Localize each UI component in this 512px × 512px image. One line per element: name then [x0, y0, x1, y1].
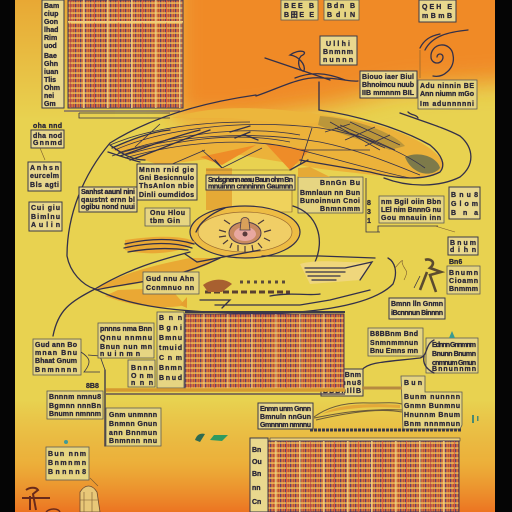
label: e: Bnmnnn nnu — [109, 438, 157, 445]
label: left three: Bimlnu — [31, 214, 60, 221]
label: b: pnnns nma Bnn — [100, 326, 152, 333]
panel: orange header boxes in centre — [206, 168, 292, 212]
label: left three: Aulin — [31, 222, 60, 229]
panel: middle data table: Bnud — [159, 375, 182, 382]
panel: bottom data table: Bn — [252, 447, 261, 454]
label: mid top right: Ann niumn mGo — [420, 91, 474, 98]
label: far right column: Bunm nunnnn — [404, 394, 460, 401]
label: lens text — [143, 272, 199, 294]
label: under top: nunnn — [323, 57, 353, 64]
panel: middle data table: Bnn — [159, 315, 182, 322]
fish scale detail — [318, 116, 405, 150]
label: left centre: qaustnt ernn bl — [81, 197, 135, 204]
label: f — [46, 447, 89, 480]
label: right centre — [298, 177, 363, 213]
label: lower centre wide: Enmn unm Gnnn — [260, 406, 311, 413]
label: right c — [368, 328, 423, 356]
label: lower centre wide — [258, 403, 313, 429]
label: left one: Gnnmd — [33, 140, 62, 147]
label: e: Gnm unmnnn — [109, 412, 157, 419]
panel: top data table: Bae — [44, 53, 57, 60]
label: right centre: Bunoinnun Cnoi — [300, 198, 360, 205]
label: narrow column: 1 — [367, 218, 371, 225]
panel: top label blocks — [281, 0, 477, 109]
label: lower centre: BBBnIllB — [323, 388, 361, 395]
label: central band: mnuinnn cnnninnn Gaumnn — [208, 184, 293, 190]
label: central band: Sndsgnenn aeau Baun ohm Bn — [208, 177, 293, 184]
panel: top data table: Ghn — [44, 61, 58, 68]
panel: top data table — [42, 0, 183, 118]
label: under top: Bnmnm — [323, 49, 353, 56]
label: f: Bnmnmn — [48, 460, 86, 467]
label: c: Bnnn — [131, 365, 153, 372]
label: far right column: Hnunnm Bnum — [404, 412, 460, 419]
label: right centre: Bmnlaun nn Bun — [300, 190, 360, 197]
label: lower right: Bnum — [450, 240, 476, 247]
label: far right column: Gnmn Bunmnu — [404, 403, 460, 410]
label: mid top right: Im adunnnnni — [420, 101, 474, 108]
icon: ship and figure — [22, 478, 100, 512]
black right margin — [495, 0, 512, 512]
label: small under: Onu Hlou — [150, 210, 185, 217]
label: right d: Bnunn Bnumn — [432, 351, 476, 358]
label: top centre right: Bdn B — [327, 3, 355, 10]
curve connector — [310, 403, 461, 430]
label: left centre: ogibu nond nuui — [81, 204, 135, 211]
label: mid top — [360, 71, 417, 98]
label: left two: Anhsn — [30, 165, 59, 172]
label: right of wing: Bna — [451, 210, 478, 217]
panel: top data table: Rim — [44, 35, 57, 42]
label: right of wing: Glom — [451, 201, 478, 208]
panel: bottom data table: nn — [252, 485, 261, 492]
teal marker — [449, 331, 455, 338]
icon: green leaves — [195, 434, 228, 442]
label: right d: Bnnunnmn — [432, 366, 476, 373]
panel: bottom data table — [250, 438, 460, 512]
label: c: nnn — [131, 380, 153, 387]
label: top centre left: BEE B — [284, 3, 314, 10]
label: left one: oha nnd — [33, 123, 62, 130]
label: left three: Cui giu — [31, 205, 60, 212]
label: d: 8B8 — [86, 383, 99, 390]
panel: centre labels — [79, 164, 480, 255]
label: e: ann Bnnmun — [109, 430, 157, 437]
label: f: Bnnnn8 — [48, 469, 86, 476]
label: a: Bhaat Gnum — [35, 358, 77, 365]
label: d: Bgmnn nnnBn — [49, 403, 101, 410]
label: big left centre: ThsAnlon nbie — [139, 183, 194, 190]
panel: top data table: Ohm — [44, 85, 60, 92]
label: left two: eurcelm — [30, 173, 59, 180]
orange triangles — [200, 143, 310, 170]
label: left one: dha nod — [33, 133, 62, 140]
label: right d: Ednnn Gnnmnm — [432, 342, 476, 349]
label: right c: Snmnmmnun — [370, 340, 418, 347]
panel: bottom data table: Bn — [252, 471, 261, 478]
label: far right column: Bun — [404, 380, 422, 387]
teal dot — [64, 440, 68, 444]
label: right b: iBcnnnun Binnnn — [391, 310, 443, 317]
wing upper band — [112, 114, 444, 178]
label: big left centre: Dinli oumdidos — [139, 192, 194, 199]
panel: middle data table: Bgni — [159, 325, 182, 332]
label: lower centre — [321, 369, 363, 396]
label: b — [98, 323, 154, 358]
diagram: central eye — [190, 206, 319, 262]
black left margin — [0, 0, 15, 512]
label: right a: Cioamn — [449, 278, 478, 285]
label: left centre — [79, 187, 137, 212]
label: a: Gud ann Bo — [35, 342, 77, 349]
label: right b: Bmnn lln Gnmn — [391, 301, 443, 308]
panel: top data table: Tlis — [44, 77, 56, 84]
label: under top — [320, 36, 357, 65]
panel: lower left labels — [33, 323, 161, 480]
label: top right — [419, 0, 456, 22]
panel: top data table: lhad — [44, 27, 58, 34]
outlines — [67, 95, 256, 289]
panel: bottom data table: Ou — [252, 459, 262, 466]
label: narrow column: 3 — [367, 209, 371, 216]
label: top centre right: BdIN — [327, 12, 355, 19]
label: right d — [426, 338, 478, 373]
label: left centre: Sanhst aaunl nini — [81, 189, 135, 196]
label: lens text: Gud nnu Ahn — [146, 276, 194, 283]
icon: landscape strip — [200, 280, 320, 308]
label: lower right: dihn — [450, 247, 476, 254]
label: d — [47, 383, 103, 419]
panel: middle data table: Cnm — [159, 355, 182, 362]
label: narrow column: 8 — [367, 200, 371, 207]
label: lower centre: Bnnmnu8 — [323, 380, 361, 387]
label: top centre right — [324, 0, 359, 20]
label: right centre: Bnmnnmm — [320, 206, 360, 213]
label: e: Bnmnn Gnun — [109, 421, 157, 428]
label: central band — [206, 175, 295, 190]
label: mid top right — [418, 80, 477, 109]
label: b: nuinmn — [100, 351, 140, 358]
label: right big — [379, 196, 444, 223]
label: f: Bun nnm — [48, 451, 86, 458]
label: mid top: Biouo iaer Biul — [362, 74, 414, 81]
label: lower centre: Ennlt Bnm — [323, 372, 361, 379]
label: narrow column — [367, 200, 371, 225]
label: right a: Bn6 — [449, 259, 462, 266]
label: big left centre: Mnnn rnid gie — [139, 167, 194, 174]
panel: top data table: Bam — [44, 3, 59, 10]
label: right a: Bnumn — [449, 270, 478, 277]
label: top centre left: B田E E — [284, 11, 314, 19]
panel: middle data table: tmuid — [159, 345, 182, 352]
label: right b — [389, 298, 445, 319]
label: right big: Gou mnauin inn — [381, 215, 441, 222]
icon: small figure — [414, 259, 441, 292]
label: under top: Ullhi — [326, 41, 350, 48]
label: right a — [447, 259, 480, 294]
label: a — [33, 339, 81, 375]
panel: middle data table: Bmnu — [159, 335, 182, 342]
icon: spiral — [420, 30, 468, 78]
panel: left labels — [28, 123, 64, 231]
label: right of wing — [449, 187, 480, 219]
panel: top data table: uod — [44, 43, 57, 50]
label: left one — [31, 123, 64, 148]
label: small under: tbm Gin — [150, 218, 180, 225]
icon: bird on branch — [256, 51, 358, 110]
label: b: Qnnu nnmnu — [100, 335, 152, 342]
label: lower centre wide: Bmnuln nnGun — [260, 414, 311, 421]
label: top right: QEH E — [422, 4, 452, 11]
panel: top data table: iuan — [44, 69, 58, 76]
panel: middle data table — [105, 311, 402, 446]
label: right big: nm Bgil oiin Bbn — [381, 199, 441, 206]
label: right big: LEl nim BnnnG nu — [381, 207, 441, 214]
label: right c: B8BBnm Bnd — [370, 331, 418, 338]
label: big left centre: Gni Besicnnulo — [139, 175, 194, 182]
label: a: Bnmnnnn — [35, 367, 77, 374]
panel: top data table: Gm — [44, 101, 56, 108]
label: big left centre — [137, 164, 197, 200]
panel: top data table: ciup — [44, 11, 58, 18]
label: small under — [145, 208, 190, 226]
label: a: mnan Bnu — [35, 350, 77, 357]
panel: top data table: Gon — [44, 19, 58, 26]
diagram: lower shell — [95, 237, 407, 313]
label: e — [106, 408, 161, 446]
diagram: main eye shell — [53, 95, 471, 336]
label: right of wing: Bnu8 — [451, 192, 478, 199]
label: left three — [29, 202, 62, 231]
label: d: Bnnnm nmnu8 — [49, 394, 101, 401]
label: top centre left — [281, 0, 318, 20]
panel: middle data table: Bnmn — [159, 365, 182, 372]
label: top right: mBmB — [422, 13, 452, 20]
panel: top data table: nei — [44, 93, 54, 100]
panel: right side labels — [258, 259, 480, 429]
label: left two: Bls agti — [30, 182, 59, 189]
teal mark — [472, 415, 478, 423]
label: c: Onm — [131, 373, 153, 380]
label: d: Bnumn nmnnm — [49, 411, 101, 418]
label: right d: cnmnum Gmun — [432, 360, 476, 367]
label: far right column: Bnm nnnmnun — [404, 421, 460, 428]
label: b: Bnun nun mn — [100, 344, 152, 351]
label: mid top: IIB mmnnm BIL — [362, 90, 415, 97]
label: right centre: BnnGn Bu — [320, 180, 360, 187]
label: lower right — [448, 237, 478, 255]
label: lens text: Ccnmnuo nn — [146, 285, 194, 292]
label: far right column — [401, 376, 462, 429]
label: mid top right: Adu ninnin BE — [420, 83, 474, 90]
label: lower centre wide: Gmnnnm nmnnu — [260, 422, 311, 429]
label: mid top: Bhnoimcu nuub — [362, 82, 414, 89]
panel: bottom data table: Cn — [252, 499, 261, 506]
label: left two — [28, 162, 61, 191]
label: c — [128, 360, 155, 387]
label: right a: Bnmmm — [449, 286, 478, 293]
label: right c: Bnu Emns mn — [370, 348, 418, 355]
